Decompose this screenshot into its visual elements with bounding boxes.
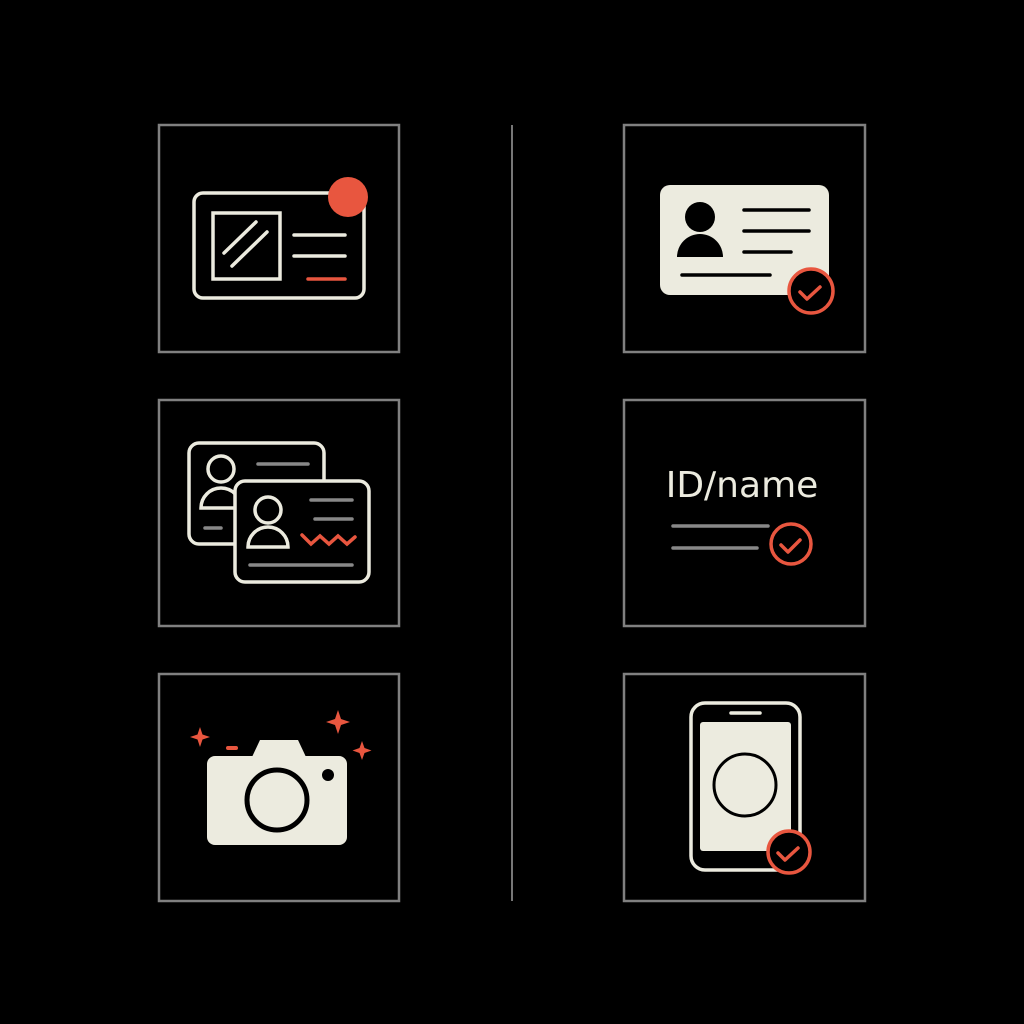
panel: camera: [159, 674, 399, 901]
panel: ID card with alert: [159, 125, 399, 352]
icon: check badge: [768, 831, 810, 873]
icon: phone: [691, 703, 800, 870]
icon: two overlapping ID cards: [189, 443, 369, 582]
panel: ID/name verification: [624, 400, 865, 626]
text: ID/name: ID/name: [666, 465, 818, 506]
icon: ID card with notification dot: [194, 177, 368, 298]
icon: check badge: [771, 524, 811, 564]
icon: camera with sparkles: [190, 710, 372, 845]
panel: verified ID card: [624, 125, 865, 352]
panel: duplicate ID cards: [159, 400, 399, 626]
panel: phone selfie verification: [624, 674, 865, 901]
icon: check badge: [789, 269, 833, 313]
icon: filled ID card: [660, 185, 829, 295]
